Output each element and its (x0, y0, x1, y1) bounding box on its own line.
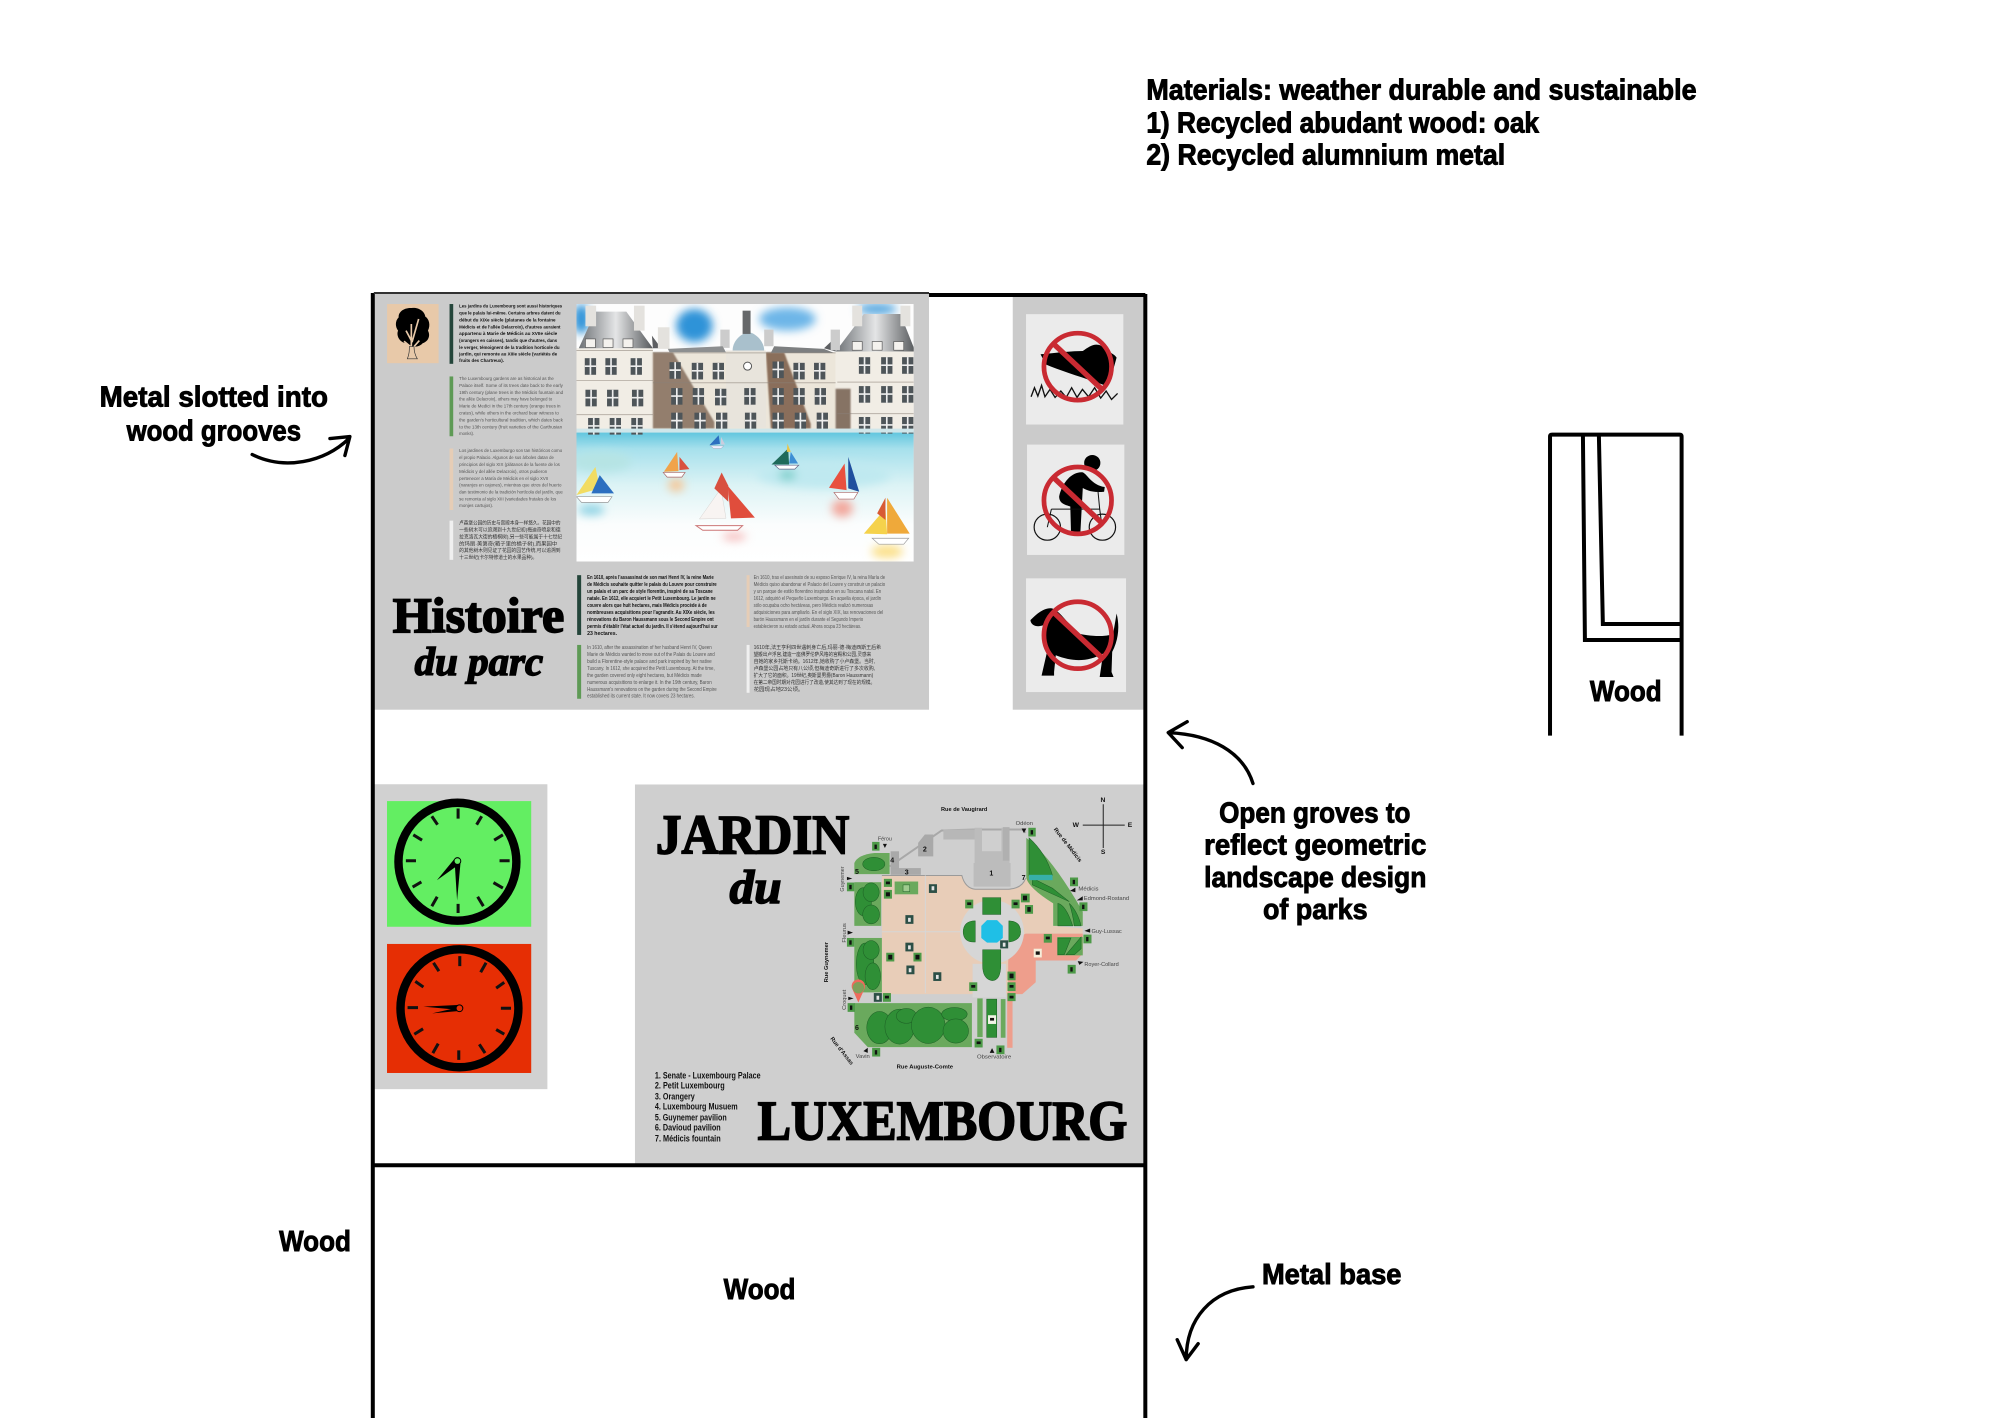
text block: upper left multilingual note: the garden's horticultural tradition, which dates back (459, 417, 563, 423)
legend list: 2. Petit Luxembourg (655, 1081, 725, 1091)
text block: lower bars and history paragraphs: nombreuses acquisitions pour l'agrandir. Au XIXe siècle, les (587, 610, 715, 616)
legend list: 6. Davioud pavilion (655, 1122, 721, 1132)
annotation: open groves: reflect geometric (1204, 829, 1426, 861)
text block: upper left multilingual note: début du XIXe siècle (platanes de la fontaine (459, 318, 556, 324)
annotation: metal slotted into wood grooves: wood grooves (126, 416, 301, 448)
numbers on map: 2 (923, 846, 927, 853)
boats (576, 467, 600, 495)
text block: lower bars and history paragraphs: 自她的家乡托斯卡纳。1612年,她收购了小卢森堡。当时, (754, 657, 876, 665)
text block: lower bars and history paragraphs: adquisiciones para ampliarlo. En el siglo XIX, las renovaciones del (754, 610, 883, 616)
text block: upper left multilingual note: crates), while others in the orchard bear witness to (459, 411, 559, 417)
label: metal base: Metal base (1262, 1259, 1402, 1291)
street and metro labels: Férou (878, 837, 892, 843)
text block: upper left multilingual note: the allée Delacroix), others may have belonged to (459, 397, 552, 403)
text block: lower bars and history paragraphs: build a Florentine-style palace and park inspired by her native (587, 659, 712, 665)
text block: lower bars and history paragraphs: 1612, adquirió el Pequeño Luxemburgo. En aquella época, el jardín (754, 596, 881, 602)
label: wood centre: Wood (724, 1274, 795, 1306)
icon: red clock (387, 944, 531, 1073)
text block: lower bars and history paragraphs: In 1610, after the assassination of her husband Henri IV, Queen (587, 645, 712, 651)
text block: lower bars and history paragraphs: 1610年,法王亨利四世遇刺身亡后,玛丽·德·梅迪西斯王后希 (754, 643, 882, 651)
medicis fountain pool and basin (981, 920, 1003, 943)
street and metro labels: Médicis (1078, 886, 1099, 892)
text block: lower bars and history paragraphs: 卢森堡公园占地只有八公顷,但梅迪奇斯进行了多次收购, (754, 664, 876, 672)
legend list: 1. Senate - Luxembourg Palace (655, 1071, 761, 1081)
numbers on map: 1 (989, 870, 993, 877)
text block: lower bars and history paragraphs: 望搬出卢浮宫,建造一座佛罗伦萨风格的宫殿和公园,灵感来 (754, 650, 872, 658)
panel: prohibition signs (1013, 293, 1145, 710)
materials heading: 2) Recycled alumnium metal (1146, 139, 1505, 171)
text block: upper left multilingual note: (orangers en caisses), tandis que d'autres, dans (459, 338, 557, 344)
palace buildings (890, 829, 1026, 866)
legend list: 4. Luxembourg Musuem (655, 1101, 738, 1111)
watercolour painting of the palace and boats (571, 303, 915, 562)
text block: lower bars and history paragraphs: de Médicis souhaite quitter le palais du Louvre pour construire (587, 582, 717, 588)
numbers on map: 3 (905, 869, 909, 876)
text block: lower bars and history paragraphs: the garden covered only eight hectares, but Médicis made (587, 673, 702, 679)
legend list (655, 1071, 761, 1143)
title: Jardin du Luxembourg: du (730, 861, 781, 914)
arrow: metal base (1177, 1287, 1253, 1360)
text block: upper left multilingual note: Les jardins du Luxembourg sont aussi historiques (459, 304, 562, 310)
compass (1073, 797, 1133, 856)
street and metro labels: Odéon (1016, 821, 1033, 827)
annotation: open groves: Open groves to (1219, 797, 1410, 829)
arrow: metal slotted (252, 437, 350, 463)
compass: N (1101, 797, 1106, 804)
street and metro labels: Guynemer (840, 866, 846, 892)
text block: lower bars and history paragraphs (577, 575, 885, 700)
text block: lower bars and history paragraphs: natale. En 1612, elle acquiert le Petit Luxembourg. Le jardin ne (587, 596, 716, 602)
text block: lower bars and history paragraphs: 23 hectares. (587, 631, 618, 637)
street and metro labels: Guy-Lussac (1091, 929, 1122, 935)
materials heading: 1) Recycled abudant wood: oak (1146, 108, 1540, 140)
text block: upper left multilingual note: appartenu à Marie de Médicis au XVIIe siècle (459, 331, 557, 337)
icon: no walking on grass (1026, 314, 1123, 425)
street and metro labels: Observatoire (977, 1055, 1011, 1061)
text block: upper left multilingual note: dan testimonio de la tradición hortícola del jardín, que (459, 489, 563, 495)
compass: S (1101, 849, 1106, 856)
text block: lower bars and history paragraphs: Tuscany. In 1612, she acquired the Petit Luxembourg. At the time, (587, 666, 715, 672)
side section diagram (1550, 435, 1682, 736)
map pin (852, 979, 865, 1002)
text block: upper left multilingual note: monjes cartujos). (459, 503, 493, 509)
text block: lower bars and history paragraphs: 花园现占地23公顷。 (754, 685, 803, 693)
text block: upper left multilingual note: 的其他树木则见证了花园的园艺传统,可以追溯到 (459, 547, 561, 554)
label: wood on section: Wood (1590, 676, 1662, 708)
arrow: open groves (1168, 722, 1253, 783)
annotation: metal slotted into wood grooves: Metal slotted into (100, 382, 328, 414)
text block: upper left multilingual note: The Luxembourg gardens are as historical as the (459, 376, 554, 382)
street and metro labels: Vavin (856, 1054, 870, 1060)
numbers on map: 7 (1022, 875, 1026, 882)
text block: upper left multilingual note: Palace itself. Some of its trees date back to the early (459, 383, 563, 389)
materials heading: Materials: weather durable and sustainable (1146, 75, 1697, 107)
numbers on map: 6 (855, 1025, 859, 1032)
numbers on map: 5 (855, 869, 859, 876)
text block: lower bars and history paragraphs: En 1610, après l'assassinat de son mari Henri IV, la reine Marie (587, 575, 714, 581)
text block: upper left multilingual note: 一些树木可以追溯到十九世纪初(梅迪奇喷泉和德 (459, 527, 561, 534)
text block: upper left multilingual note: 的玛丽·美第奇(箱子里的橘子树),而果园中 (459, 541, 557, 548)
compass: E (1128, 822, 1133, 829)
text block: upper left multilingual note (450, 304, 563, 561)
text block: lower bars and history paragraphs: barón Haussmann en el jardín durante el Segundo Imperio (754, 617, 863, 623)
text block: lower bars and history paragraphs: un palais et un parc de style florentin, inspiré de sa Toscane (587, 589, 713, 595)
text block: upper left multilingual note: Marie de Medici in the 17th century (orange trees in (459, 404, 561, 410)
text block: lower bars and history paragraphs: couvre alors que huit hectares, mais Médicis procède à de (587, 603, 707, 609)
street and metro labels: Rue de Médicis (1052, 827, 1083, 864)
materials heading (1146, 75, 1697, 171)
text block: lower bars and history paragraphs: Médicis quiso abandonar el Palacio del Louvre y construir un palacio (754, 582, 885, 588)
text block: upper left multilingual note: principios del siglo XIX (plátanos de la fuente de los (459, 462, 560, 468)
text block: lower bars and history paragraphs: En 1610, tras el asesinato de su esposo Enrique IV, la reina María de (754, 575, 885, 581)
text block: lower bars and history paragraphs: Haussmann's renovations on the garden during the Second Empire (587, 687, 717, 693)
annotation: metal slotted into wood grooves (100, 382, 328, 448)
annotation: open groves: of parks (1263, 894, 1368, 926)
numbers on map: 4 (890, 857, 894, 864)
map of the garden (824, 797, 1133, 1071)
street and metro labels: Rue Guynemer (824, 941, 830, 982)
text block: upper left multilingual note: 十三世纪(卡尔特修道士的水果品种)。 (459, 554, 537, 561)
street and metro labels: Croquet (842, 989, 848, 1010)
legend list: 7. Médicis fountain (655, 1133, 721, 1143)
street and metro labels: Rue Auguste-Comte (897, 1065, 953, 1071)
text block: lower bars and history paragraphs: rénovations du Baron Haussmann sous le Second Empire ont (587, 617, 714, 623)
panel: history board (374, 293, 929, 710)
panel: opening hours clocks (374, 784, 547, 1089)
icon: green clock (387, 801, 531, 927)
street and metro labels (824, 807, 1129, 1071)
title: Jardin du Luxembourg: JARDIN (656, 804, 849, 866)
legend list: 5. Guynemer pavilion (655, 1112, 727, 1122)
text block: upper left multilingual note: pertenecer a María de Médicis en el siglo XVII (459, 476, 548, 482)
text block: upper left multilingual note: fruits des Chartreux). (459, 358, 505, 364)
text block: upper left multilingual note: el propio Palacio. Algunos de sus árboles datan de (459, 455, 554, 461)
compass: W (1073, 822, 1080, 829)
annotation: open groves (1204, 797, 1426, 926)
title: Histoire du parc: du parc (415, 639, 544, 684)
street and metro labels: Royer-Collard (1084, 962, 1119, 968)
icon: no dogs (1026, 578, 1126, 692)
text block: lower bars and history paragraphs: 在第二帝国时期对花园进行了改造,使其达到了现在的规模。 (754, 678, 875, 686)
text block: lower bars and history paragraphs: Marie de Médicis wanted to move out of the Palais du Louvre and (587, 652, 715, 658)
text block: upper left multilingual note: que le palais lui-même. Certains arbres datent du (459, 311, 561, 317)
title: Jardin du Luxembourg: LUXEMBOURG (758, 1090, 1127, 1152)
annotation: open groves: landscape design (1204, 862, 1426, 894)
info and service icons (847, 828, 1091, 1057)
text block: upper left multilingual note: 卢森堡公园的历史与宫殿本身一样悠久。花园中的 (459, 520, 561, 527)
text block: upper left multilingual note: monks). (459, 431, 474, 437)
text block: upper left multilingual note: le verger, témoignent de la tradition horticole du (459, 345, 560, 351)
title: Histoire du parc (393, 588, 564, 684)
text block: upper left multilingual note: se remonta al siglo XIII (variedades frutales de los (459, 496, 557, 502)
icon: no cycling (1027, 445, 1124, 555)
text block: upper left multilingual note: 拉克洛瓦大街的梧桐树),另一些可能属于十七世纪 (459, 534, 562, 541)
text block: upper left multilingual note: (naranjos en cajones), mientras que otros del huerto (459, 483, 562, 489)
text block: lower bars and history paragraphs: established its current state. It now covers 23 hectares. (587, 694, 695, 700)
text block: upper left multilingual note: 19th century (plane trees in the Médicis fountain and (459, 390, 563, 396)
panel: garden map board (635, 784, 1145, 1166)
title: Histoire du parc: Histoire (393, 588, 564, 643)
text block: upper left multilingual note: Médicis y del allée Delacroix), otros pudieron (459, 469, 547, 475)
text block: upper left multilingual note: jardin, qui remonte au XIIIe siècle (variétés de (458, 352, 557, 358)
street and metro labels: Rue de Vaugirard (941, 807, 988, 813)
text block: upper left multilingual note: to the 13th century (fruit varieties of the Carthusian (459, 424, 562, 430)
street and metro labels: Fleurus (842, 923, 848, 943)
text block: lower bars and history paragraphs: numerous acquisitions to enlarge it. In the 19th century, Baron (587, 680, 712, 686)
text block: upper left multilingual note: Los jardines de Luxemburgo son tan históricos como (459, 448, 562, 454)
path background and beige lawns (882, 875, 1083, 994)
title: Jardin du Luxembourg (656, 804, 1127, 1152)
text block: upper left multilingual note: Médicis et de l'allée Delacroix), d'autres auraient (459, 325, 561, 331)
numbers on map (855, 846, 1026, 1032)
street and metro labels: Rue d'Assas (829, 1036, 854, 1066)
legend list: 3. Orangery (655, 1091, 695, 1101)
entrance arrows (847, 828, 1090, 1053)
street and metro labels: Edmond-Rostand (1084, 896, 1129, 902)
icon: tree (387, 304, 439, 363)
text block: lower bars and history paragraphs: sólo ocupaba ocho hectáreas, pero Médicis realizó numerosas (754, 603, 873, 609)
garden beds (854, 838, 1083, 1047)
text block: lower bars and history paragraphs: y un parque de estilo florentino inspirados en su Toscana natal. En (754, 589, 881, 595)
text block: lower bars and history paragraphs: 扩大了它的面积。19世纪,奥斯曼男爵(Baron Haussmann) (754, 671, 873, 679)
structure lines: main frame (373, 293, 1145, 1418)
text block: lower bars and history paragraphs: permis d'établir l'état actuel du jardin. Il s'étend aujourd'hui sur (587, 624, 718, 630)
label: wood left: Wood (279, 1226, 351, 1258)
text block: lower bars and history paragraphs: establecieron su estado actual. Ahora ocupa 23 hectáreas. (754, 624, 861, 630)
